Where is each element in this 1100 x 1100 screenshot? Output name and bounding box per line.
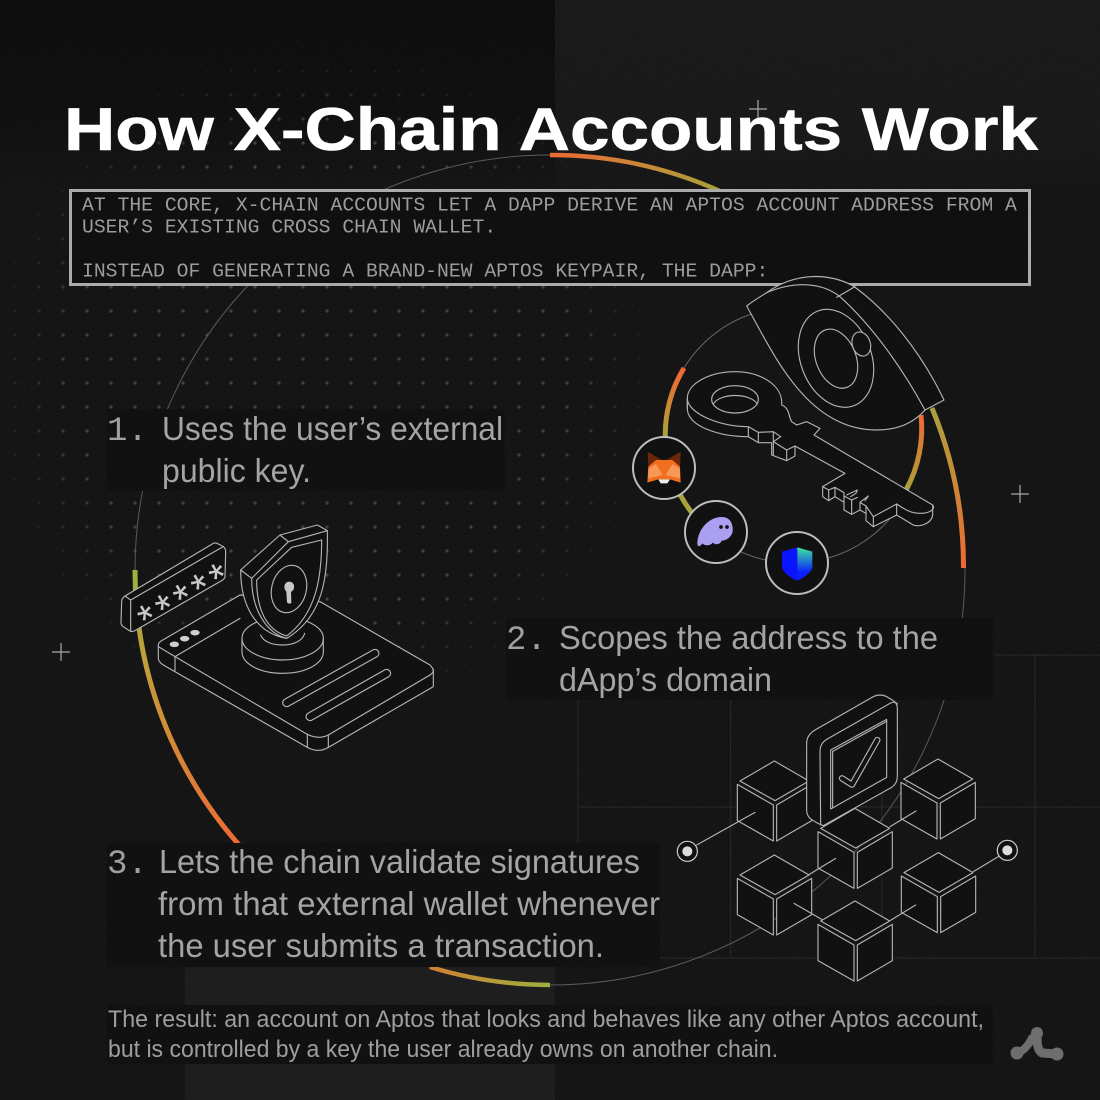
orbit ring: small [665,307,922,563]
result text: but is controlled by a key the user already owns on another chain. [108,1036,778,1063]
step 3 text: Lets the chain validate signatures [159,843,640,880]
shield [241,525,327,638]
plus markers [52,100,1029,661]
step 2 text: 2. [506,622,547,660]
intro text box [70,190,1030,284]
illustration: validated block network [677,695,1017,981]
logo [1010,1027,1064,1060]
pedestal [242,617,323,673]
intro text box: AT THE CORE, X-CHAIN ACCOUNTS LET A DAPP DERIVE AN APTOS ACCOUNT ADDRESS FROM A [82,194,1017,216]
node: right [997,840,1017,860]
card [158,595,433,750]
step 1 text [107,409,505,491]
node: left [677,841,697,861]
step 2 text [506,618,993,700]
step 2 text: dApp’s domain [559,661,772,698]
blocks [737,759,976,981]
step 3 text: the user submits a transaction. [158,927,604,964]
result text: The result: an account on Aptos that looks and behaves like any other Aptos account, [108,1006,984,1033]
step 1 text: Uses the user’s external [162,410,503,447]
verified screen [807,695,897,826]
title: How X-Chain Accounts Work [64,96,1039,163]
icon: trust wallet [766,532,828,594]
icon: metamask wallet [633,437,695,499]
result text [107,1005,993,1064]
password field: ***** [129,553,238,643]
step 3 text [107,843,660,967]
step 3 text: 3. [107,846,148,884]
step 3 text: from that external wallet whenever [158,885,660,922]
intro text box: USER’S EXISTING CROSS CHAIN WALLET. [82,216,496,238]
eye disc [747,277,944,430]
intro text box: INSTEAD OF GENERATING A BRAND-NEW APTOS KEYPAIR, THE DAPP: [82,260,768,282]
step 1 text: public key. [162,452,311,489]
orbit ring: large [135,155,965,985]
illustration: shield, password and card [121,525,433,750]
icon: phantom wallet [685,501,747,563]
key [687,372,933,527]
connectors [697,811,998,921]
illustration: eye disc and key [687,277,944,527]
step 1 text: 1. [107,413,148,451]
step 2 text: Scopes the address to the [559,619,938,656]
